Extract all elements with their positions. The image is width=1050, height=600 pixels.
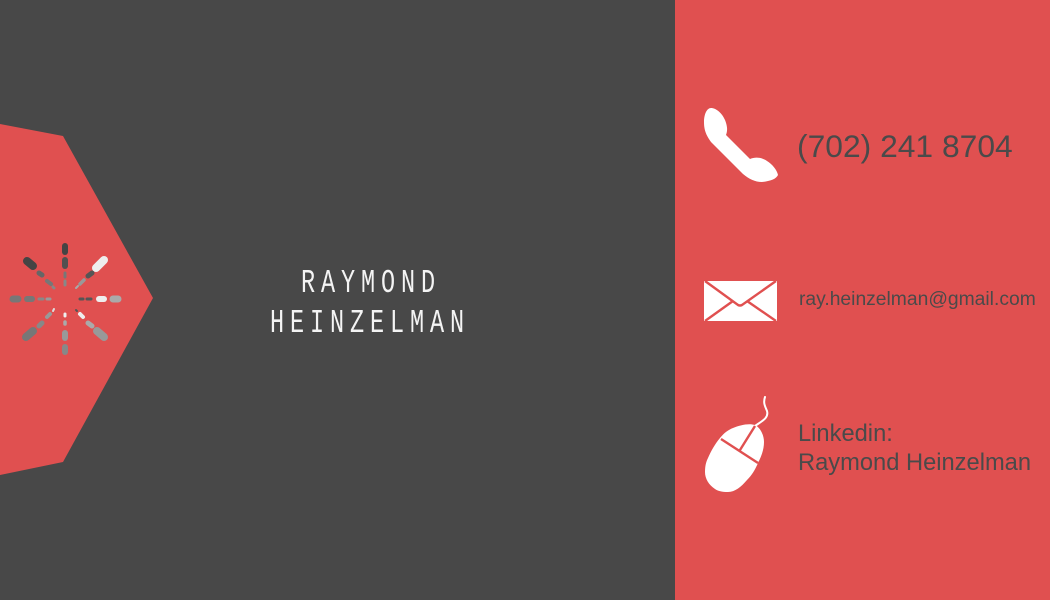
linkedin name: Raymond Heinzelman bbox=[798, 450, 1031, 476]
icon: telephone handset bbox=[704, 108, 778, 182]
name line 1: RAYMOND bbox=[301, 264, 441, 302]
name heading bbox=[270, 264, 470, 342]
name line 2: HEINZELMAN bbox=[270, 304, 470, 342]
red hexagon shape bbox=[0, 124, 153, 475]
dark background panel bbox=[0, 0, 675, 600]
mouse cord bbox=[755, 397, 767, 426]
linkedin label: Linkedin: bbox=[798, 421, 893, 447]
phone number: (702) 241 8704 bbox=[797, 128, 1013, 164]
red contact panel bbox=[675, 0, 1050, 600]
icon: computer mouse bbox=[705, 397, 767, 492]
icon: radial burst logo bbox=[13, 246, 118, 352]
mouse body bbox=[705, 424, 764, 492]
icon: envelope bbox=[704, 281, 777, 321]
email address: ray.heinzelman@gmail.com bbox=[799, 289, 1036, 310]
linkedin text bbox=[798, 421, 1031, 476]
